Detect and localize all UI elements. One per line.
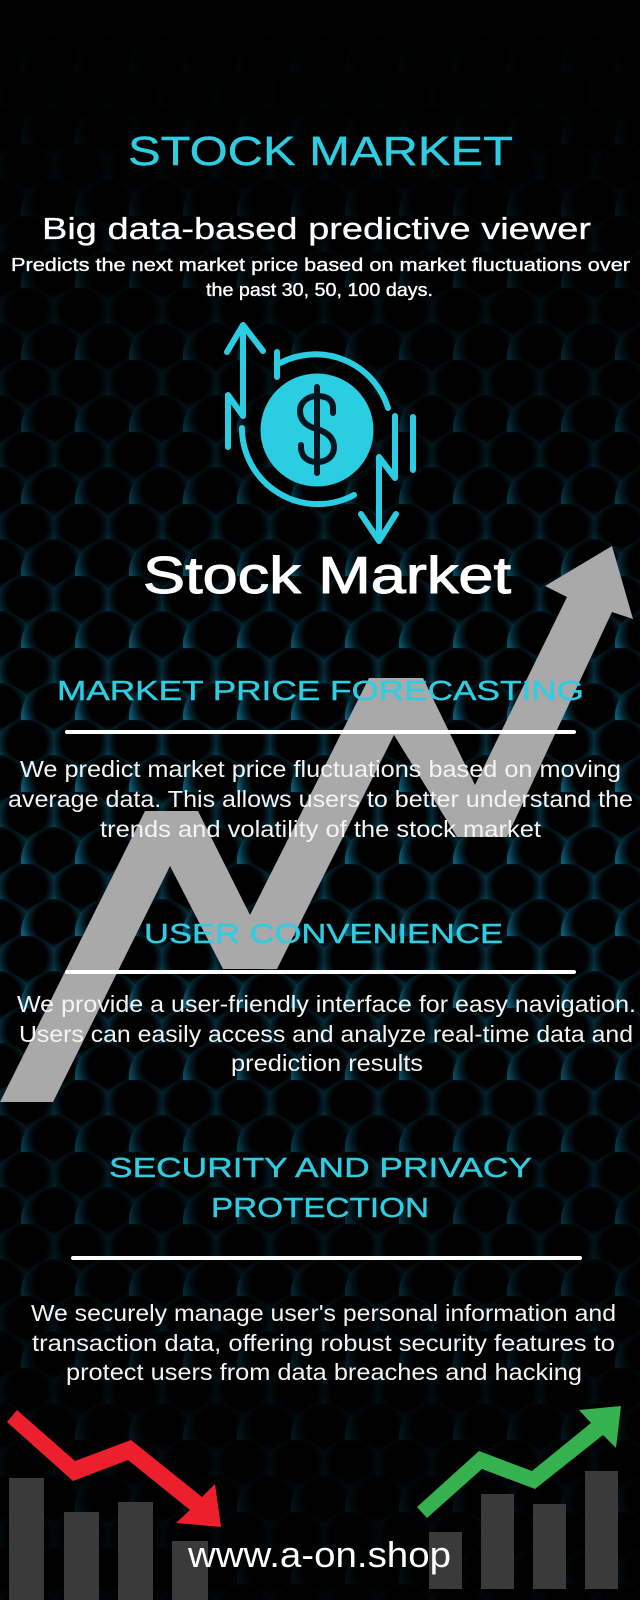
rising bar chart xyxy=(429,1471,618,1589)
icon: dollar coin with up and down arrows xyxy=(227,325,413,541)
section: security and privacy protection xyxy=(31,1152,616,1385)
body text xyxy=(17,991,636,1076)
intro text xyxy=(11,255,630,300)
heading: PROTECTION xyxy=(211,1192,429,1223)
heading: MARKET PRICE FORECASTING xyxy=(57,675,584,706)
divider xyxy=(71,1256,582,1260)
body text: protect users from data breaches and hacking xyxy=(66,1359,582,1385)
icon caption: Stock Market xyxy=(143,547,512,605)
body text: transaction data, offering robust security features to xyxy=(32,1330,615,1356)
icon: coin xyxy=(260,374,374,486)
body text: average data. This allows users to better understand the xyxy=(8,786,633,812)
body text xyxy=(8,756,633,842)
red falling arrow xyxy=(7,1410,221,1527)
intro text: the past 30, 50, 100 days. xyxy=(206,280,433,300)
body text: Users can easily access and analyze real-time data and xyxy=(19,1021,633,1047)
body text xyxy=(31,1300,616,1385)
green rising arrow xyxy=(417,1406,621,1518)
heading xyxy=(109,1152,532,1223)
divider xyxy=(65,730,576,734)
large grey rising zigzag arrow xyxy=(0,546,633,1102)
icon: bottom circular arc xyxy=(242,428,354,504)
falling bar chart xyxy=(9,1478,208,1600)
subtitle: Big data-based predictive viewer xyxy=(42,211,591,246)
body text: We securely manage user's personal information and xyxy=(31,1300,616,1326)
body text: trends and volatility of the stock market xyxy=(100,816,542,842)
icon: up arrow xyxy=(227,325,263,447)
heading: USER CONVENIENCE xyxy=(144,918,503,949)
body text: prediction results xyxy=(231,1050,423,1076)
icon: down arrow xyxy=(361,416,413,541)
section: market price forecasting xyxy=(8,675,633,842)
website address: www.a-on.shop xyxy=(187,1534,451,1575)
icon: top circular arc xyxy=(277,352,388,408)
section: user convenience xyxy=(17,918,636,1076)
body text: We predict market price fluctuations based on moving xyxy=(20,756,621,782)
body text: We provide a user-friendly interface for easy navigation. xyxy=(17,991,636,1017)
heading: SECURITY AND PRIVACY xyxy=(109,1152,532,1183)
intro text: Predicts the next market price based on market fluctuations over xyxy=(11,255,630,275)
divider xyxy=(65,970,576,974)
icon: dollar sign xyxy=(300,387,334,473)
title: STOCK MARKET xyxy=(128,128,513,174)
